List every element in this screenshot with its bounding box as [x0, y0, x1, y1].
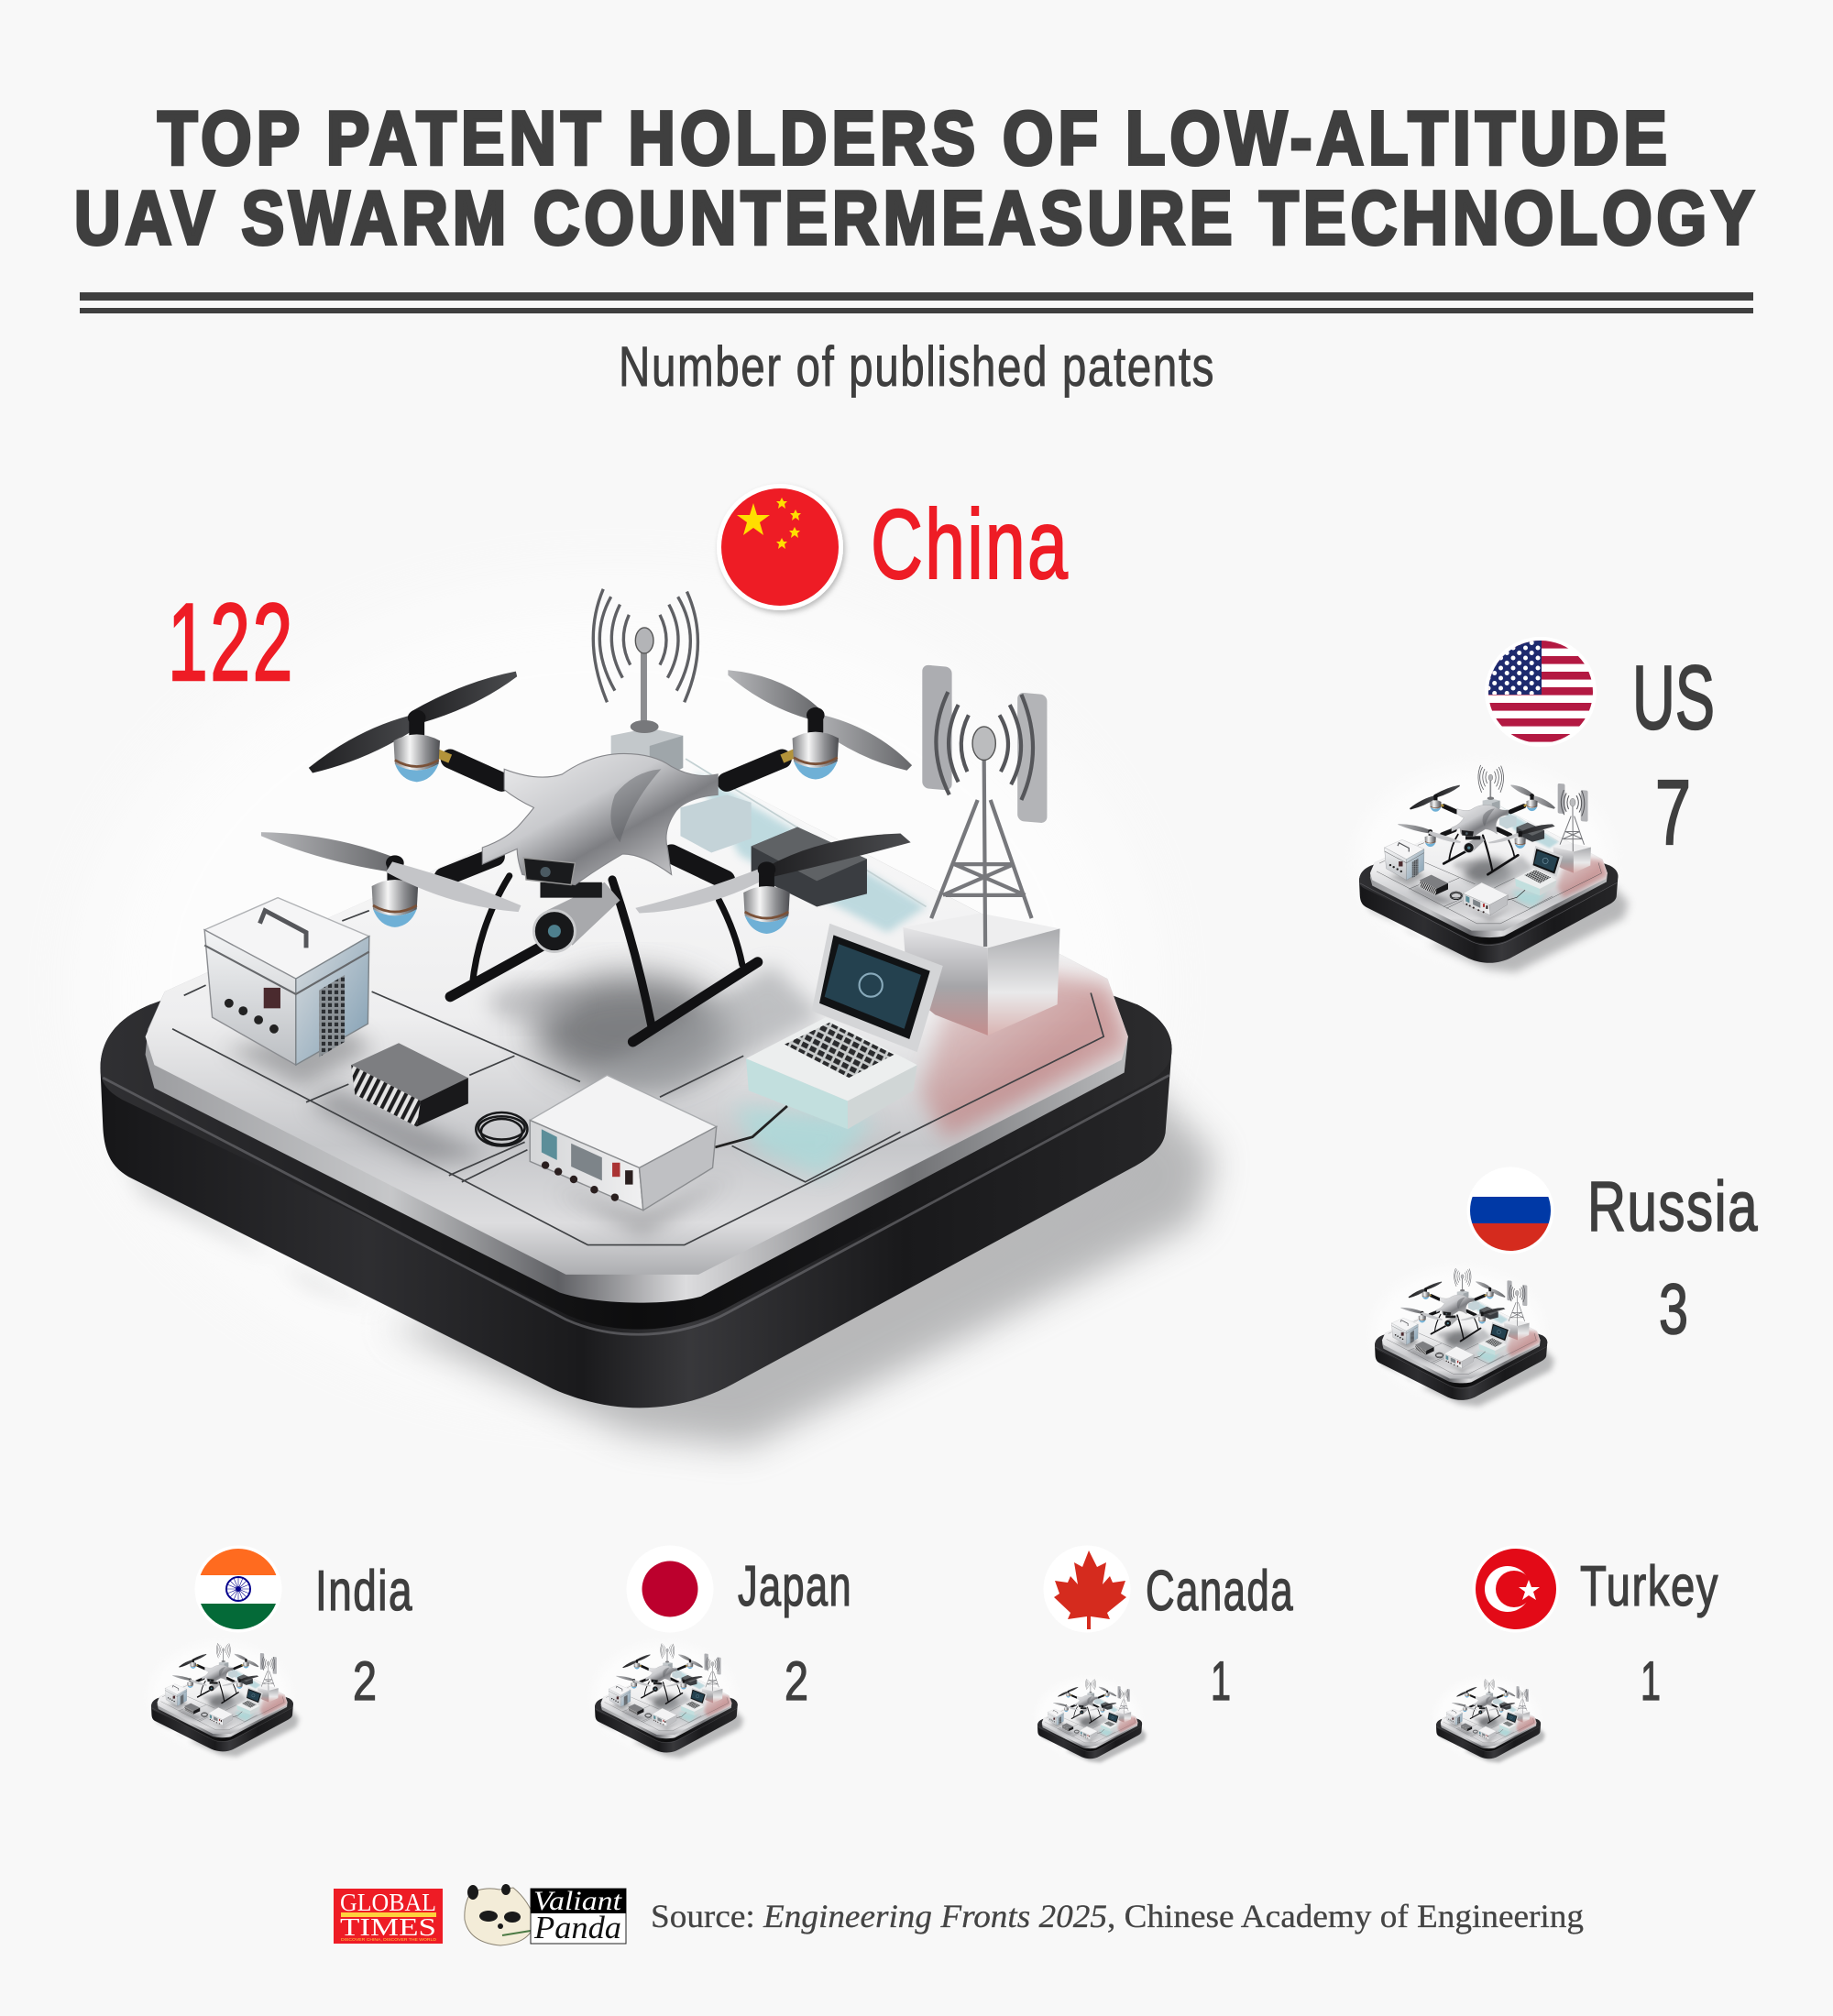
US flag [1488, 641, 1593, 742]
US drone platform thumbnail [1356, 765, 1629, 972]
India label: India [315, 1560, 413, 1623]
soft white halo [90, 592, 1145, 1389]
Canada value: 1 [1211, 1650, 1231, 1712]
laptop [715, 924, 943, 1147]
Valiant Panda logo: Valiant [533, 1886, 622, 1916]
Russia drone platform thumbnail [1373, 1268, 1554, 1407]
India flag [200, 1549, 277, 1629]
Global Times logo: TIMES [340, 1913, 436, 1941]
India drone platform thumbnail [150, 1643, 299, 1757]
Japan label: Japan [738, 1555, 852, 1618]
Turkey label: Turkey [1580, 1555, 1719, 1618]
drone [261, 670, 912, 1042]
cast shadow [386, 1068, 1215, 1447]
radio tower [903, 664, 1059, 1035]
Russia value: 3 [1659, 1268, 1688, 1349]
China label: China [871, 488, 1070, 599]
Canada label: Canada [1146, 1560, 1294, 1623]
cable coil [476, 1112, 527, 1146]
Japan value: 2 [785, 1650, 808, 1712]
Canada flag [1043, 1545, 1131, 1633]
control box [530, 1075, 717, 1211]
subtitle: Number of published patents [619, 335, 1215, 398]
power box [204, 898, 369, 1065]
India value: 2 [353, 1650, 377, 1712]
gimbal camera [546, 882, 620, 946]
small dark module [351, 1043, 468, 1126]
fuselage [482, 753, 718, 885]
Valiant Panda logo: Panda [533, 1910, 621, 1945]
US label: US [1632, 647, 1715, 748]
metal plate [146, 759, 1132, 1303]
Valiant Panda logo [465, 1884, 626, 1945]
Turkey value: 1 [1641, 1650, 1661, 1712]
China flag [717, 484, 843, 610]
title [74, 95, 1759, 260]
Japan flag [627, 1545, 713, 1633]
top-left rotor [309, 672, 517, 782]
illustration: China drone platform [90, 589, 1215, 1447]
top-right rotor [728, 670, 912, 780]
back equipment [680, 794, 867, 906]
China value: 122 [168, 581, 295, 704]
source line: Source: Engineering Fronts 2025 , Chinese Academy of Engineering [651, 1898, 1584, 1934]
back antenna [593, 589, 697, 784]
Russia flag [1470, 1197, 1551, 1251]
panel lines [172, 759, 1103, 1245]
US value: 7 [1655, 761, 1691, 864]
front-left rotor [261, 832, 521, 927]
Turkey flag [1472, 1545, 1560, 1633]
front-right rotor [635, 833, 911, 934]
Canada drone platform thumbnail [1037, 1679, 1147, 1762]
Russia label: Russia [1587, 1167, 1759, 1246]
double rule under title [80, 292, 1753, 313]
landing gear [450, 876, 758, 1042]
Global Times logo [334, 1889, 443, 1944]
black arm sleeves [444, 759, 782, 880]
Global Times logo: GLOBAL [340, 1889, 436, 1916]
surface reflections [225, 772, 1132, 1234]
Japan drone platform thumbnail [593, 1643, 743, 1758]
Turkey drone platform thumbnail [1435, 1679, 1545, 1762]
black base [100, 823, 1172, 1408]
Global Times logo: DISCOVER CHINA, DISCOVER THE WORLD [341, 1937, 437, 1942]
